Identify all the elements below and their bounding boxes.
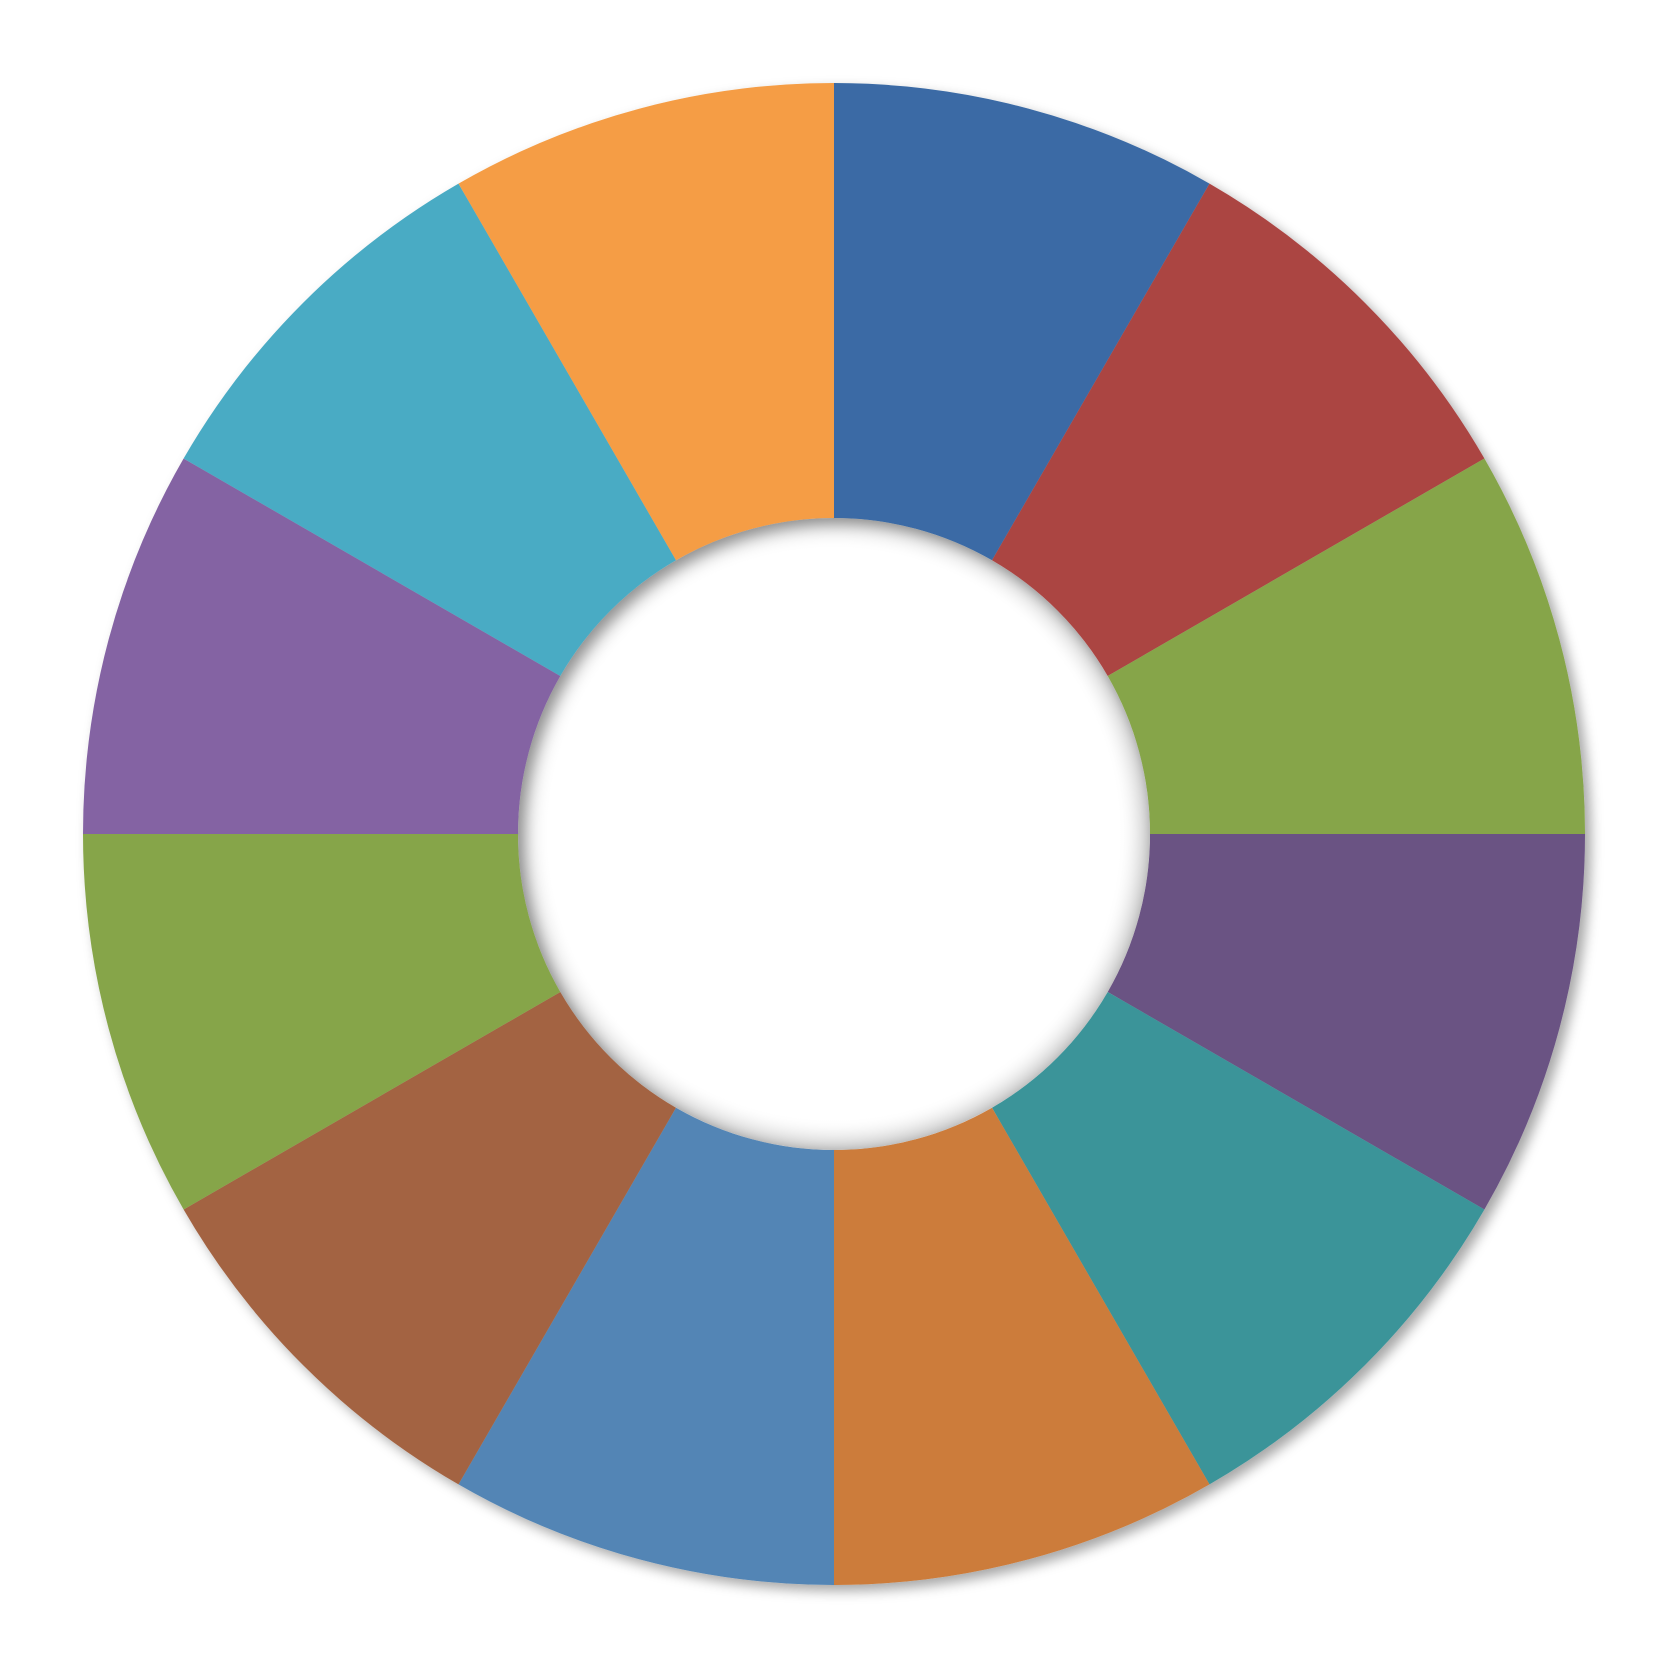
- inner hole shadow: [518, 518, 1150, 1150]
- segment 8: brown: [184, 992, 676, 1484]
- segment 11: cyan: [184, 184, 676, 676]
- segment 10: purple: [83, 458, 560, 834]
- segment 9: green: [83, 834, 560, 1210]
- segment 5: teal: [992, 992, 1484, 1484]
- segment 12: light orange: [458, 83, 834, 560]
- segment 4: dark purple: [1108, 834, 1585, 1210]
- segment 1: blue: [834, 83, 1210, 560]
- segment 6: orange: [834, 1108, 1210, 1585]
- segment 3: green: [1108, 458, 1585, 834]
- segment 7: steel blue: [458, 1108, 834, 1585]
- segment 2: red: [992, 184, 1484, 676]
